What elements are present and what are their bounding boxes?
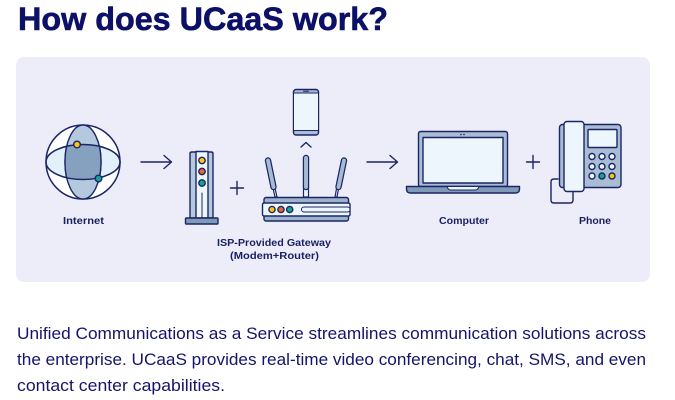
icon: modem <box>186 152 218 224</box>
description text: Unified Communications as a Service streamlines communication solutions across <box>17 324 646 343</box>
label: Internet: Internet <box>63 215 105 227</box>
description text: the enterprise. UCaaS provides real-time video conferencing, chat, SMS, and even <box>17 350 646 369</box>
plus: modem and router <box>230 182 244 194</box>
label: Computer: Computer <box>439 215 489 227</box>
label: Phone: Phone <box>579 215 611 227</box>
description text: contact center capabilities. <box>17 376 225 395</box>
arrow: internet to modem <box>141 156 172 168</box>
label: ISP-Provided Gateway: ISP-Provided Gateway <box>217 237 331 249</box>
icon: wireless chevron <box>301 142 311 147</box>
icon: globe <box>46 125 120 199</box>
icon: desk phone <box>551 122 621 203</box>
icon: smartphone <box>294 90 318 135</box>
title: How does UCaaS work? <box>18 1 388 37</box>
label: ISP-Provided Gateway: (Modem+Router) <box>230 250 319 262</box>
description text <box>17 324 646 395</box>
icon: laptop <box>406 132 520 193</box>
label: ISP-Provided Gateway <box>217 237 331 262</box>
plus: computer and phone <box>526 156 540 168</box>
arrow: gateway to computer <box>367 156 398 168</box>
icon: router <box>262 158 350 221</box>
panel: diagram background <box>16 57 650 282</box>
